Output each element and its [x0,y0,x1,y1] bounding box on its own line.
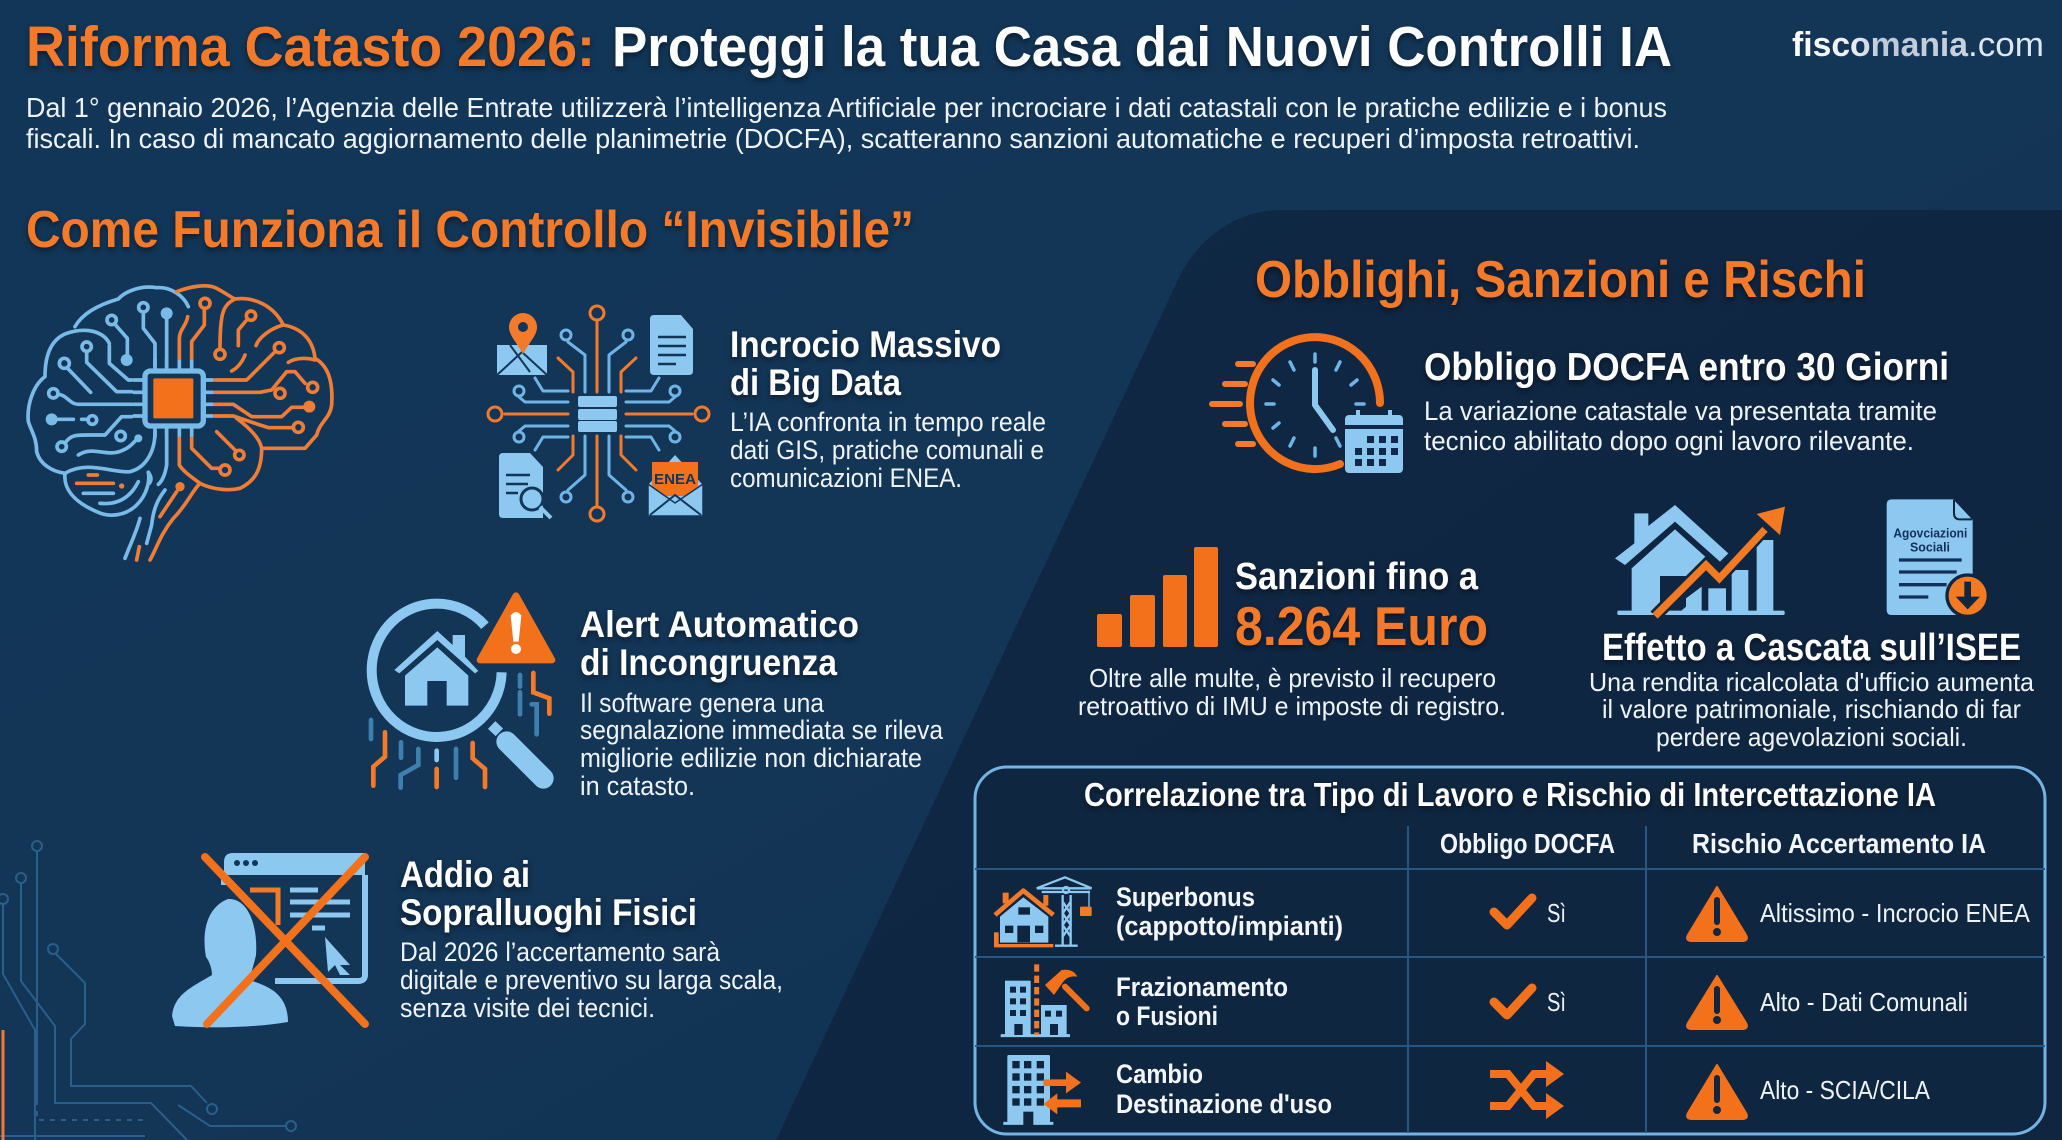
text: alto dati comunali: Alto - Dati Comunali [1760,987,1968,1017]
icon: building and hammer [1001,964,1087,1036]
text: incrocio massivo: comunicazioni ENEA. [730,463,962,493]
text: altissimo: Altissimo - Incrocio ENEA [1760,898,2031,928]
text: obbligo docfa [1424,346,1949,456]
table title: Correlazione tra Tipo di Lavoro e Rischio di Intercettazione IA [1084,776,1936,813]
row: superbonus [994,877,2031,946]
text: alert automatico: in catasto. [580,771,695,801]
icon: shuffle arrows [1490,1061,1564,1119]
row: frazionamento [1001,964,1968,1036]
text: sanzioni [1078,556,1506,721]
text: addio ai sopralluoghi [400,854,783,1023]
text: frazionamento [1116,972,1288,1031]
item: sanzioni [1078,547,1506,721]
text: effetto cascata: Una rendita ricalcolata d'ufficio aumenta [1589,667,2035,697]
text: alert automatico [580,604,944,801]
text: superbonus: Superbonus [1116,882,1255,912]
text: frazionamento: Frazionamento [1116,972,1288,1002]
icon: map pin [497,313,547,375]
icon: document search [499,453,551,518]
text: cambio destinazione [1116,1059,1332,1119]
text: effetto cascata: il valore patrimoniale, rischiando di far [1602,694,2021,724]
intro text: Dal 1° gennaio 2026, l’Agenzia delle Entrate utilizzerà l’intelligenza Artificiale per incrociare i dati catastali con le pratiche edilizie e i bonus [26,92,1667,123]
icon: magnifier with house and warning [371,596,552,788]
text: superbonus: (cappotto/impianti) [1116,911,1343,941]
icon: warning [1687,976,1747,1029]
text: incrocio massivo [730,324,1046,493]
icon: social benefits document [1887,499,1988,616]
item: incrocio massivo [488,306,1046,521]
logo: fiscomania.com: .com [1968,26,2044,64]
icon: circuit brain [28,286,332,560]
text: addio ai sopralluoghi: Sopralluoghi Fisici [400,892,697,933]
text: sanzioni: Sanzioni fino a [1235,556,1479,598]
title: Riforma Catasto 2026: [26,15,595,79]
text: sanzioni: retroattivo di IMU e imposte di registro. [1078,691,1506,721]
text: addio ai sopralluoghi: Dal 2026 l’accertamento sarà [400,937,721,967]
icon: check [1494,898,1532,925]
text: effetto cascata [1589,627,2035,752]
text: effetto cascata: perdere agevolazioni sociali. [1656,722,1967,752]
icon: warning [1687,887,1747,941]
icon: warning [1687,1065,1747,1119]
icon: document [650,315,693,375]
title: Proteggi la tua Casa dai Nuovi Controlli IA [612,15,1672,79]
intro text: fiscali. In caso di mancato aggiornamento delle planimetrie (DOCFA), scatteranno sanzioni automatiche e recuperi d’imposta retroattivi. [26,123,1640,154]
text: cambio destinazione: Destinazione d'uso [1116,1089,1332,1119]
text: si: Sì [1547,898,1566,928]
text: sanzioni: 8.264 Euro [1235,595,1488,657]
text: obbligo docfa: tecnico abilitato dopo ogni lavoro rilevante. [1424,426,1914,456]
icon: ENEA envelope [648,455,703,516]
text: incrocio massivo: di Big Data [730,362,901,403]
table headers [1440,828,1986,859]
text: addio ai sopralluoghi: digitale e preventivo su larga scala, [400,965,783,995]
text: incrocio massivo: dati GIS, pratiche comunali e [730,435,1044,465]
text: addio ai sopralluoghi: Addio ai [400,854,530,895]
icon: rising bars [1097,547,1218,647]
panel: obblighi background [776,210,2062,1140]
text: sanzioni: Oltre alle multe, è previsto il recupero [1089,663,1496,693]
item: addio ai sopralluoghi [172,853,783,1027]
icon: ENEA envelope: ENEA [654,471,696,488]
icon: server [578,396,617,432]
icon: big data network [488,306,709,521]
table: correlazione [975,767,2045,1134]
icon: clock with calendar [1212,337,1403,473]
heading: come funziona: Come Funziona il Controllo “Invisibile” [26,201,914,259]
heading: obblighi: Obblighi, Sanzioni e Rischi [1255,251,1866,309]
text: alert automatico: segnalazione immediata se rileva [580,715,944,745]
text: obbligo docfa: La variazione catastale va presentata tramite [1424,396,1937,426]
text: alert automatico: di Incongruenza [580,642,837,683]
table frame [975,767,2045,1134]
text: alto scia cila: Alto - SCIA/CILA [1760,1075,1931,1105]
text: addio ai sopralluoghi: senza visite dei tecnici. [400,993,655,1023]
text: alert automatico: migliorie edilizie non dichiarate [580,743,922,773]
text: obbligo docfa: Obbligo DOCFA entro 30 Giorni [1424,346,1949,389]
icon: social benefits document: Agovciazioni [1893,525,1967,540]
text: incrocio massivo: L’IA confronta in tempo reale [730,407,1046,437]
item: obbligo docfa [1212,337,1949,473]
logo: fiscomania.com: fiscomania [1792,26,1969,64]
icon: social benefits document: Sociali [1910,540,1950,555]
text: si: Sì [1547,987,1566,1017]
text: superbonus [1116,882,1343,941]
icon: house with rising arrow [1615,505,1785,616]
intro text [26,92,1667,154]
title [26,15,1672,79]
text: frazionamento: o Fusioni [1116,1001,1218,1031]
decorative circuit corner [0,841,296,1140]
table headers: Obbligo DOCFA [1440,828,1615,859]
row: cambio destinazione [1003,1055,1931,1125]
icon: crossed person and browser [172,853,365,1027]
icon: house and crane [994,877,1092,946]
text: alert automatico: Alert Automatico [580,604,859,645]
text: cambio destinazione: Cambio [1116,1059,1203,1089]
icon: check [1494,988,1532,1015]
icon: building with arrows [1003,1055,1081,1125]
text: alert automatico: Il software genera una [580,688,825,718]
item: alert automatico [371,596,944,801]
item: effetto cascata [1589,499,2035,752]
table headers: Rischio Accertamento IA [1692,828,1986,859]
text: incrocio massivo: Incrocio Massivo [730,324,1001,365]
